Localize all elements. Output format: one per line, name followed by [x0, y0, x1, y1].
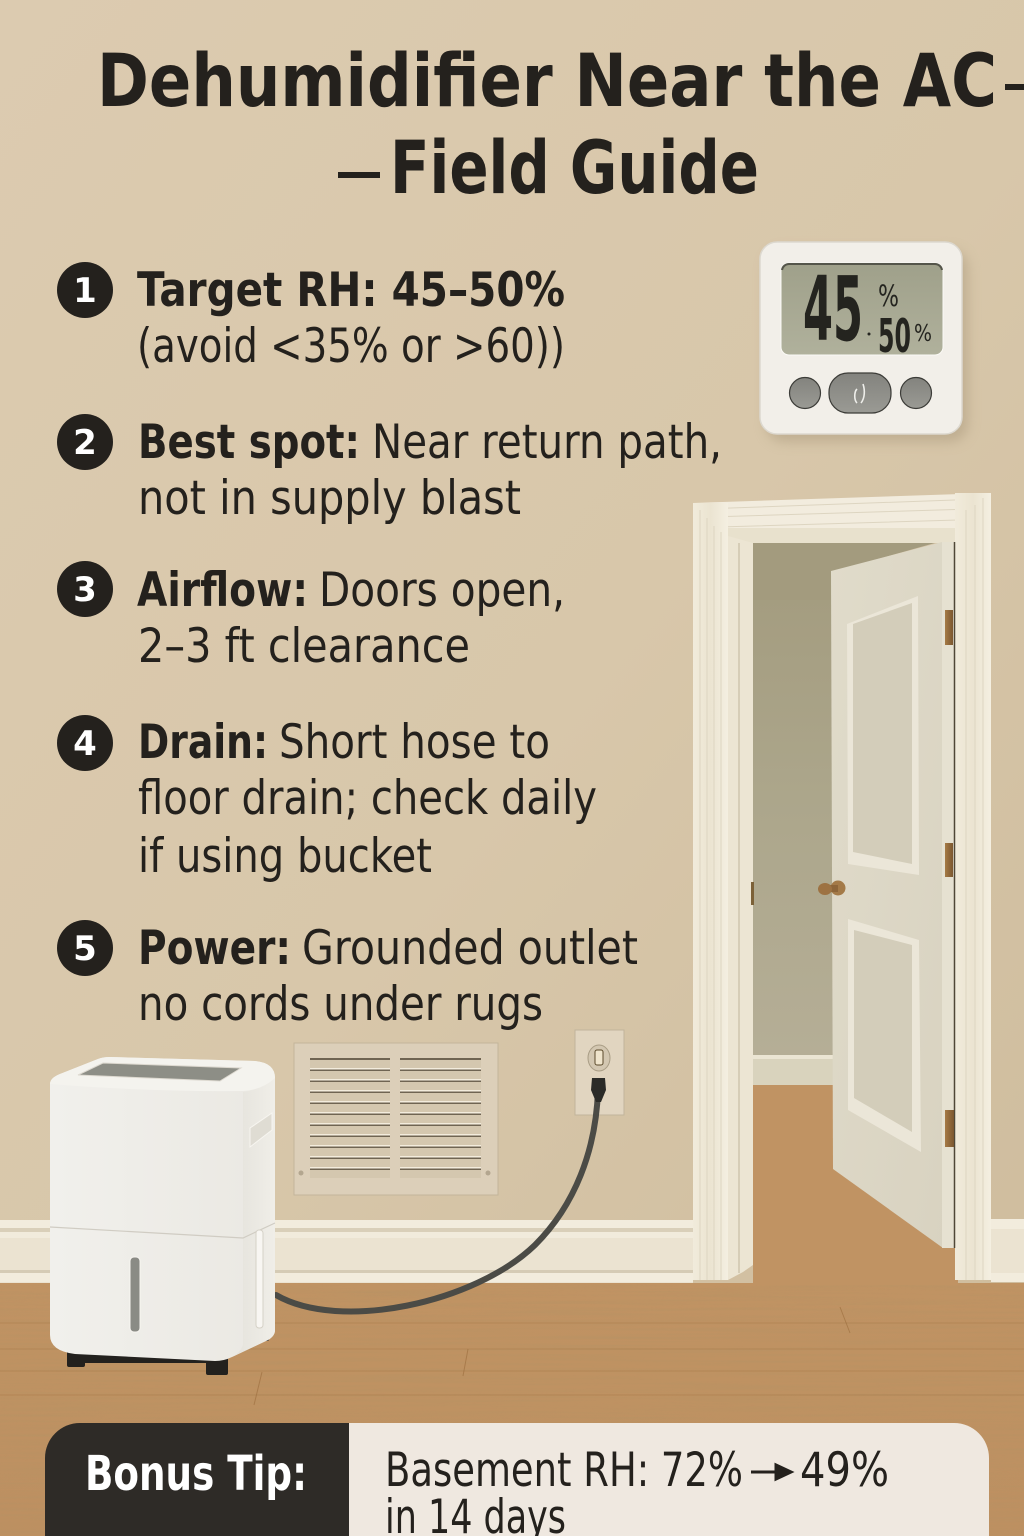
- number badge 1: 1: [73, 271, 97, 311]
- number badge 2: 2: [73, 423, 97, 463]
- dehumidifier feet: [67, 1327, 269, 1375]
- number badge 5: 5: [73, 929, 97, 969]
- water level window: [130, 1257, 140, 1332]
- handle slot: [256, 1230, 263, 1328]
- number badge 2: [57, 414, 113, 470]
- baseboard: [0, 1219, 1024, 1283]
- item 2 text: Best spot:: [138, 415, 360, 470]
- dehumidifier body: [50, 1057, 275, 1361]
- side vent: [250, 1113, 272, 1147]
- far room: [750, 540, 958, 1285]
- hygrometer screen: 50: [878, 309, 911, 363]
- number badge 3: [57, 561, 113, 617]
- item 3 text: [137, 563, 565, 674]
- item 5: power: [57, 920, 638, 1032]
- number badge 5: [57, 920, 113, 976]
- item 2: best spot: [57, 414, 722, 526]
- item 4 text: Short hose to: [279, 715, 550, 770]
- item 1 text: (avoid <35% or >60)): [137, 319, 565, 374]
- item 5 text: no cords under rugs: [138, 977, 543, 1032]
- number badge 4: [57, 715, 113, 771]
- number badge 3: 3: [73, 570, 97, 610]
- bonus tip text: Basement RH: 72%: [385, 1443, 743, 1498]
- bonus tip label: [45, 1423, 349, 1536]
- hygrometer buttons: [790, 373, 932, 413]
- door hinges: [945, 610, 954, 1147]
- item 3 text: 2–3 ft clearance: [138, 619, 470, 674]
- bonus tip label: Bonus Tip:: [85, 1446, 307, 1502]
- item 2 text: not in supply blast: [138, 471, 521, 526]
- item 5 text: [138, 921, 638, 1032]
- wall vent grille: [294, 1043, 498, 1195]
- item 3 text: Doors open,: [319, 563, 565, 618]
- number badge 4: 4: [73, 724, 97, 764]
- item 5 text: Grounded outlet: [302, 921, 638, 976]
- hygrometer screen: %: [914, 321, 932, 347]
- item 2 text: Near return path,: [372, 415, 722, 470]
- item 4 text: floor drain; check daily: [138, 771, 597, 826]
- control panel: [78, 1063, 241, 1081]
- item 1 text: [137, 263, 565, 374]
- item 4 text: if using bucket: [138, 829, 432, 884]
- item 4 text: [138, 715, 597, 884]
- item 1 text: Target RH: 45–50%: [137, 263, 565, 318]
- item 4 text: Drain:: [138, 715, 268, 770]
- wall outlet: [575, 1030, 624, 1115]
- plug: [591, 1078, 606, 1102]
- door knob: [818, 880, 846, 896]
- hygrometer screen: 45: [803, 257, 863, 361]
- item 4: drain: [57, 715, 597, 884]
- bonus tip text: 49%: [800, 1443, 889, 1498]
- dehumidifier: [50, 1057, 275, 1375]
- door frame casing: [693, 493, 991, 1280]
- bonus tip text: [349, 1423, 989, 1536]
- hygrometer screen: %: [878, 279, 899, 313]
- item 3 text: Airflow:: [137, 563, 308, 618]
- item 2 text: [138, 415, 722, 526]
- title: Field Guide: [390, 126, 759, 211]
- wood floor: [0, 1283, 1024, 1536]
- open doorway: [693, 493, 991, 1285]
- tank seam: [50, 1223, 275, 1238]
- dehumidifier side: [232, 1076, 275, 1357]
- door leaf: [818, 542, 954, 1248]
- dehumidifier top: [50, 1057, 275, 1091]
- title: [97, 39, 1024, 211]
- item 3: airflow: [57, 561, 565, 674]
- power cord: [276, 1090, 598, 1311]
- item 5 text: Power:: [138, 921, 291, 976]
- item 1: target RH: [57, 262, 565, 374]
- lower door panel: [848, 919, 921, 1152]
- number badge 1: [57, 262, 113, 318]
- upper door panel: [847, 596, 919, 875]
- icon: wall hygrometer: [760, 242, 968, 442]
- bonus tip banner: [45, 1423, 989, 1536]
